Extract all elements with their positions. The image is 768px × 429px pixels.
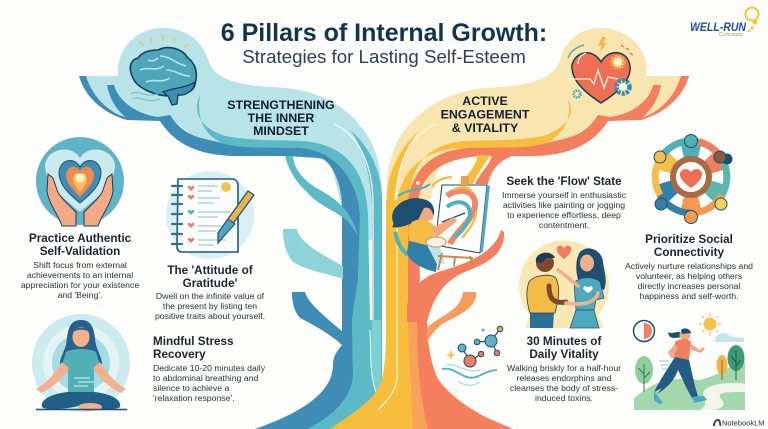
branch heading: active engagement and vitality: ENGAGEMENT bbox=[441, 108, 530, 122]
body text: achievements to an internal bbox=[27, 270, 133, 280]
body text: appreciation for your existence bbox=[21, 280, 139, 290]
pillar 3: mindful stress recovery bbox=[32, 314, 266, 412]
branch heading: strengthening the inner mindset bbox=[227, 98, 335, 138]
subtitle: Strategies for Lasting Self-Esteem bbox=[242, 46, 526, 67]
body text: induced toxins. bbox=[535, 393, 593, 403]
icon: heart in hands bbox=[36, 137, 124, 226]
heading: Connectivity bbox=[654, 246, 725, 259]
branch heading: active engagement and vitality: ACTIVE bbox=[462, 94, 508, 108]
heading bbox=[153, 335, 234, 361]
title: 6 Pillars of Internal Growth: bbox=[221, 19, 547, 47]
icon: meditating woman bbox=[32, 314, 130, 412]
body text: Walking briskly for a half-hour bbox=[507, 363, 621, 373]
icon: gratitude notebook bbox=[166, 171, 254, 259]
heading: The 'Attitude of bbox=[167, 264, 253, 277]
body text: cleanses the body of stress- bbox=[510, 383, 618, 393]
title bbox=[221, 19, 547, 67]
heading bbox=[645, 233, 733, 259]
branch heading: active engagement and vitality bbox=[441, 94, 530, 135]
pillar 4: seek the flow state bbox=[392, 175, 627, 272]
logo: Well-Run Concepts: WELL-RUN bbox=[690, 20, 746, 34]
body text: Dwell on the infinite value of bbox=[156, 291, 265, 301]
body text: the present by listing ten bbox=[163, 301, 257, 311]
heading bbox=[29, 232, 132, 258]
pillar 5: 30 minutes of daily vitality bbox=[442, 241, 621, 403]
icon: heart with pulse and gears bbox=[567, 37, 633, 103]
body text: volunteer, as helping others bbox=[636, 271, 743, 281]
icon: molecule and waves bbox=[442, 326, 503, 385]
icon: couple connecting bbox=[519, 241, 609, 328]
body text: Immerse yourself in enthusiastic bbox=[502, 190, 627, 200]
heading bbox=[527, 335, 601, 361]
branch heading: strengthening the inner mindset: STRENGTHENING bbox=[227, 98, 335, 112]
branch heading: strengthening the inner mindset: THE INNER bbox=[248, 111, 314, 125]
body text: happiness and self-worth. bbox=[640, 291, 738, 301]
right tree: orange and yellow bbox=[330, 28, 689, 429]
heading bbox=[167, 264, 253, 290]
body text: to abdominal breathing and bbox=[153, 373, 258, 383]
body text: positive traits about yourself. bbox=[155, 311, 265, 321]
body text bbox=[502, 190, 627, 230]
body text bbox=[625, 261, 753, 301]
heading: Self-Validation bbox=[40, 245, 120, 258]
body text: Shift focus from external bbox=[33, 260, 127, 270]
body text: directly increases personal bbox=[638, 281, 740, 291]
body text bbox=[153, 363, 266, 403]
heading: Gratitude' bbox=[183, 277, 238, 290]
pillar 1: practice authentic self-validation bbox=[21, 137, 139, 300]
body text bbox=[21, 260, 139, 300]
logo: Well-Run Concepts bbox=[690, 8, 758, 38]
heading: Prioritize Social bbox=[645, 233, 733, 246]
heading: Daily Vitality bbox=[529, 348, 599, 361]
body text: releases endorphins and bbox=[516, 373, 612, 383]
body text: silence to achieve a bbox=[153, 383, 229, 393]
footer: NotebookLM mark: NotebookLM bbox=[722, 418, 765, 428]
heading: 30 Minutes of bbox=[527, 335, 601, 348]
pillar 2: attitude of gratitude bbox=[155, 171, 265, 321]
branch heading: active engagement and vitality: & VITALITY bbox=[452, 121, 519, 135]
heading: Recovery bbox=[153, 348, 206, 361]
body text: activities like painting or jogging bbox=[503, 200, 625, 210]
body text: contentment. bbox=[539, 220, 589, 230]
body text bbox=[507, 363, 621, 403]
branch heading: strengthening the inner mindset: MINDSET bbox=[253, 124, 309, 138]
logo: Well-Run Concepts: Concepts bbox=[719, 32, 743, 38]
body text: Dedicate 10-20 minutes daily bbox=[153, 363, 266, 373]
body text: to experience effortless, deep bbox=[507, 210, 621, 220]
icon: ring of people around heart bbox=[654, 134, 732, 224]
icon: woman painting on easel bbox=[392, 176, 490, 272]
heading: Mindful Stress bbox=[153, 335, 234, 348]
icon: runner in park bbox=[634, 313, 745, 410]
pillar 6: prioritize social connectivity bbox=[625, 134, 753, 410]
body text: Actively nurture relationships and bbox=[625, 261, 753, 271]
heading: Practice Authentic bbox=[29, 232, 132, 245]
left tree: teal bbox=[79, 28, 382, 429]
icon: brain bbox=[130, 35, 196, 105]
heading: Seek the 'Flow' State bbox=[506, 175, 622, 188]
body text bbox=[155, 291, 265, 321]
body text: 'relaxation response'. bbox=[153, 393, 235, 403]
body text: and 'Being'. bbox=[58, 290, 102, 300]
